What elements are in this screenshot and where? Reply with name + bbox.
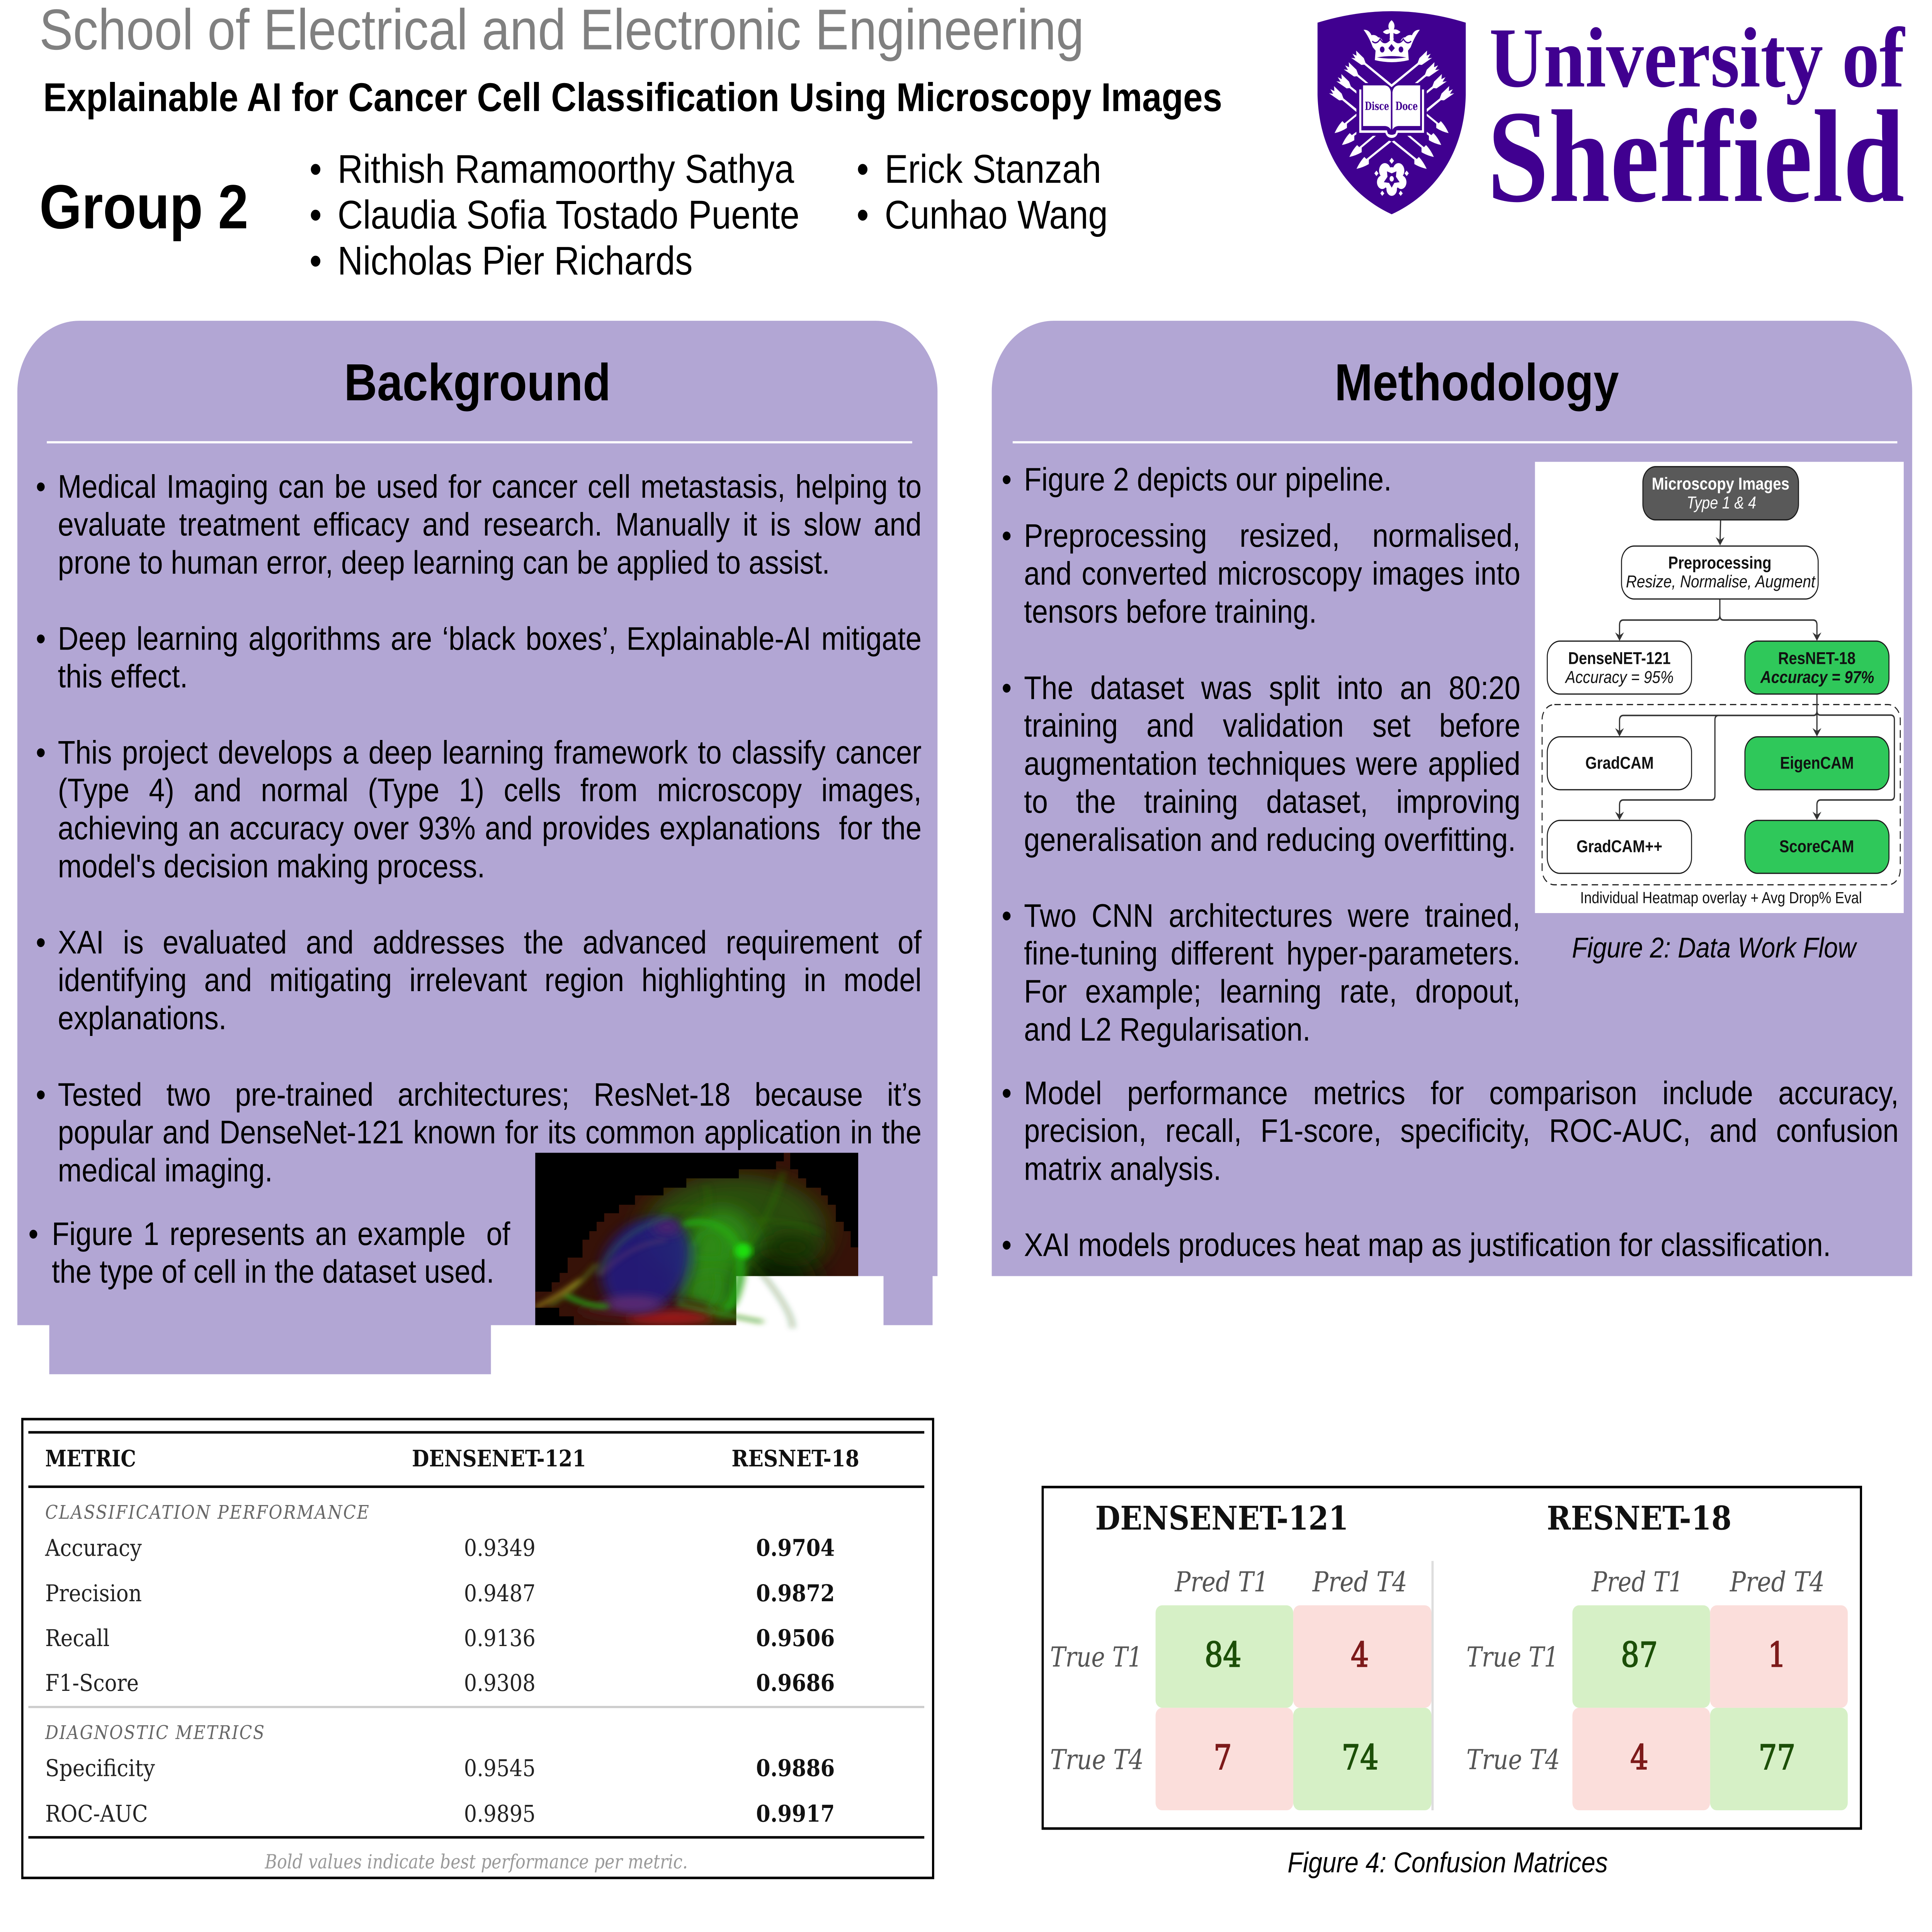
panel: methodology: • [1002,1226,1012,1263]
text: medical imaging [58,468,922,582]
node: densenet [1547,641,1692,694]
caption: figure 1: Figure 1: Cancer Cell Image [540,1369,853,1401]
row: f1-score: F1-Score [45,1669,139,1697]
logo wordmark: University of [1489,11,1905,105]
row: roc-auc: 0.9895 [464,1800,536,1827]
text: preprocessing: and converted microscopy images into [1024,555,1520,592]
text: dataset split: augmentation techniques were applied [1024,746,1520,782]
matrix: resnet cells: Pred T1 [1591,1566,1683,1598]
authors: second column: Cunhao Wang [884,193,1108,237]
authors: first column: Claudia Sofia Tostado Puente [338,193,799,237]
row: precision: 0.9872 [756,1580,835,1607]
row: precision [45,1580,835,1607]
matrix: resnet cells [1466,1566,1848,1810]
row: accuracy: 0.9704 [756,1534,835,1562]
node: preprocessing [1621,546,1818,599]
text: dataset split: The dataset was split into an 80:20 [1024,670,1520,706]
text: XAI methods: Tested four XAI methods; GradCAM, GradCAM++, EigenCAM, & [1024,1303,1899,1339]
panel: background [17,321,937,1413]
chart: confusion matrices [1042,1486,1862,1830]
node: microscopy images: Microscopy Images [1652,474,1789,493]
logo wordmark: Sheffield [1487,84,1905,230]
text: medical imaging: evaluate treatment efficacy and research. Manually it is slow and [58,507,922,543]
matrix title: densenet: DENSENET-121 [1095,1499,1349,1537]
text: architectures [58,1076,922,1190]
panel: methodology: • [1002,1303,1012,1339]
row: specificity: 0.9545 [464,1755,536,1782]
text: XAI methods [1024,1302,1899,1378]
node: densenet: Accuracy = 95% [1565,667,1673,687]
node: scorecam [1745,820,1889,873]
label: heatmap evaluation: Individual Heatmap overlay + Avg Drop% Eval [1580,889,1862,906]
panel: background: • [36,620,46,657]
text: dataset split: to the training dataset, improving [1024,784,1520,820]
authors: first column: Rithish Ramamoorthy Sathya [338,147,794,192]
heading: methodology: Methodology [1335,354,1619,412]
text: medical imaging: Medical Imaging can be used for cancer cell metastasis, helping to [58,468,922,505]
row: specificity [45,1755,835,1782]
icon: university crest shield: Disce [1365,100,1389,113]
row: precision: Precision [45,1580,142,1607]
matrix: densenet cells: Pred T1 [1174,1566,1269,1598]
matrix: densenet cells: 84 [1204,1635,1242,1675]
matrix: resnet cells: 1 [1768,1635,1786,1675]
matrix: resnet cells: True T4 [1466,1743,1560,1776]
text: CNN training: fine-tuning different hyper-parameters. [1024,935,1520,972]
text: figure 1 note [52,1215,510,1291]
row: accuracy: 0.9349 [464,1534,536,1562]
panel: methodology: • [1002,670,1012,706]
authors: first column: • [310,147,322,192]
row: recall: Recall [45,1625,110,1652]
authors: first column: Nicholas Pier Richards [338,239,693,283]
text: performance metrics: Model performance metrics for comparison include accuracy, [1024,1075,1899,1111]
figure 2: data work flow diagram [1528,453,1913,925]
text: CNN training: For example; learning rate, dropout, [1024,973,1520,1010]
panel: background: • [36,468,46,505]
matrix: resnet cells: Pred T4 [1729,1566,1825,1598]
authors: second column: Erick Stanzah [884,147,1101,192]
arrows: flow connectors [1619,520,1895,816]
panel: background: • [28,1216,38,1252]
text: XAI evaluation [58,923,922,1037]
row: accuracy [45,1534,835,1562]
node: gradcam: GradCAM [1585,753,1654,772]
text: dataset split: training and validation set before [1024,707,1520,744]
matrix: resnet cells: 87 [1621,1635,1658,1675]
node: microscopy images [1643,467,1799,520]
text: performance metrics: precision, recall, F1-score, specificity, ROC-AUC, and confusion [1024,1113,1899,1149]
node: preprocessing: Preprocessing [1668,553,1772,572]
text: project aim [58,733,922,886]
node: eigencam: EigenCAM [1780,753,1854,772]
authors: first column: • [310,193,322,237]
matrix: densenet cells: Pred T4 [1312,1566,1407,1598]
authors: first column [310,146,810,284]
node: resnet: ResNET-18 [1778,648,1855,668]
table header row: METRIC [45,1445,136,1472]
section: classification performance: CLASSIFICATION PERFORMANCE [45,1501,369,1523]
row: accuracy: Accuracy [45,1534,142,1562]
node: resnet: Accuracy = 97% [1760,667,1874,687]
matrix: resnet cells: True T1 [1466,1641,1559,1673]
matrix: densenet cells: 74 [1342,1738,1379,1777]
text: XAI evaluation: explanations. [58,1000,226,1037]
authors: second column: • [857,147,869,192]
matrix: densenet cells [1050,1566,1432,1810]
row: precision: 0.9487 [464,1580,536,1607]
table header row [45,1445,859,1472]
node: densenet: DenseNET-121 [1568,648,1671,668]
panel: methodology: • [1002,461,1012,498]
row: recall: 0.9136 [464,1625,536,1652]
node: microscopy images: Type 1 & 4 [1687,493,1756,512]
row: f1-score: 0.9686 [756,1669,835,1697]
text: architectures: popular and DenseNet-121 known for its common application in the [58,1114,922,1151]
panel: methodology: • [1002,517,1012,554]
panel: methodology: • [1002,897,1012,934]
row: specificity: 0.9886 [756,1755,835,1782]
text: architectures: medical imaging. [58,1152,273,1189]
text: architectures: Tested two pre-trained architectures; ResNet-18 because it’s [58,1076,922,1113]
row: recall [45,1625,835,1652]
row: f1-score: 0.9308 [464,1669,536,1697]
logo wordmark [1487,0,1932,220]
text: medical imaging: prone to human error, deep learning can be applied to assist. [58,544,830,581]
node: preprocessing: Resize, Normalise, Augment [1626,571,1816,591]
text: heat map: XAI models produces heat map as justification for classification. [1024,1226,1831,1263]
table header row: DENSENET-121 [412,1445,586,1472]
row: f1-score [45,1669,835,1697]
panel: methodology [992,321,1912,1413]
row: roc-auc: ROC-AUC [45,1800,148,1827]
matrix: densenet cells: True T1 [1050,1641,1142,1673]
matrix title: resnet: RESNET-18 [1547,1499,1731,1537]
text: black boxes: this effect. [58,658,188,695]
panel: background: • [36,1076,46,1113]
table: model classification metrics [21,1418,934,1879]
node: gradcam++: GradCAM++ [1577,837,1662,856]
figure 1: cancer cell image [535,1153,858,1361]
authors: first column: • [310,239,322,283]
text: preprocessing: tensors before training. [1024,594,1317,630]
text: project aim: This project develops a deep learning framework to classify cancer [58,734,922,770]
text: figure 1 note: the type of cell in the dataset used. [52,1253,494,1290]
text: performance metrics [1024,1074,1899,1188]
heading: background: Background [344,354,611,412]
poster title: Explainable AI for Cancer Cell Classification Using Microscopy Images [43,75,1222,120]
panel: background: • [36,734,46,770]
node: eigencam [1745,737,1889,790]
matrix: densenet cells: True T4 [1050,1743,1144,1776]
authors: second column: • [857,193,869,237]
caption: figure 4: Figure 4: Confusion Matrices [1287,1847,1608,1879]
text: XAI evaluation: XAI is evaluated and addresses the advanced requirement of [58,924,922,961]
text: XAI methods: ScoreCAM. [1024,1341,1170,1377]
text: dataset split [1024,669,1520,859]
node: gradcam [1547,737,1692,790]
panel: methodology: • [1002,1075,1012,1111]
table footnote: Bold values indicate best performance per metric. [265,1851,688,1873]
node: scorecam: ScoreCAM [1779,837,1854,856]
text: dataset split: generalisation and reducing overfitting. [1024,822,1516,858]
text: black boxes: Deep learning algorithms are ‘black boxes’, Explainable-AI mitigate [58,620,922,657]
text: CNN training: and L2 Regularisation. [1024,1011,1311,1048]
text: project aim: model's decision making process. [58,848,485,884]
text: project aim: (Type 4) and normal (Type 1) cells from microscopy images, [58,772,922,809]
row: recall: 0.9506 [756,1625,835,1652]
caption: figure 2: Figure 2: Data Work Flow [1572,932,1856,964]
text: preprocessing [1024,517,1520,631]
text: XAI evaluation: identifying and mitigating irrelevant region highlighting in model [58,962,922,998]
text: CNN training: Two CNN architectures were trained, [1024,897,1520,934]
text: pipeline: Figure 2 depicts our pipeline. [1024,461,1392,498]
row: specificity: Specificity [45,1755,155,1782]
matrix: densenet cells: 7 [1214,1738,1232,1777]
text: project aim: achieving an accuracy over 93% and provides explanations for the [58,810,922,847]
matrix: densenet cells: 4 [1351,1635,1369,1675]
row: roc-auc: 0.9917 [756,1800,835,1827]
matrix: resnet cells: 4 [1630,1738,1648,1777]
caption: figure 3: Figure 3: Model Classification Metrics [271,1889,687,1921]
section: diagnostic metrics: DIAGNOSTIC METRICS [45,1721,264,1743]
table header row: RESNET-18 [731,1445,859,1472]
authors: second column [857,146,1117,238]
text: figure 1 note: Figure 1 represents an example of [52,1216,510,1252]
node: gradcam++ [1547,820,1692,873]
row: roc-auc [45,1800,835,1827]
matrix: resnet cells: 77 [1759,1738,1796,1777]
logo: University of Sheffield [1311,6,1932,220]
panel: background: • [36,924,46,961]
text: black boxes [58,620,922,696]
text: CNN training [1024,897,1520,1049]
group label: Group 2 [39,172,248,242]
text: performance metrics: matrix analysis. [1024,1151,1221,1187]
icon: university crest shield: Doce [1395,100,1418,113]
node: resnet [1745,641,1889,694]
text: preprocessing: Preprocessing resized, normalised, [1024,517,1520,554]
icon: university crest shield [1311,6,1476,220]
